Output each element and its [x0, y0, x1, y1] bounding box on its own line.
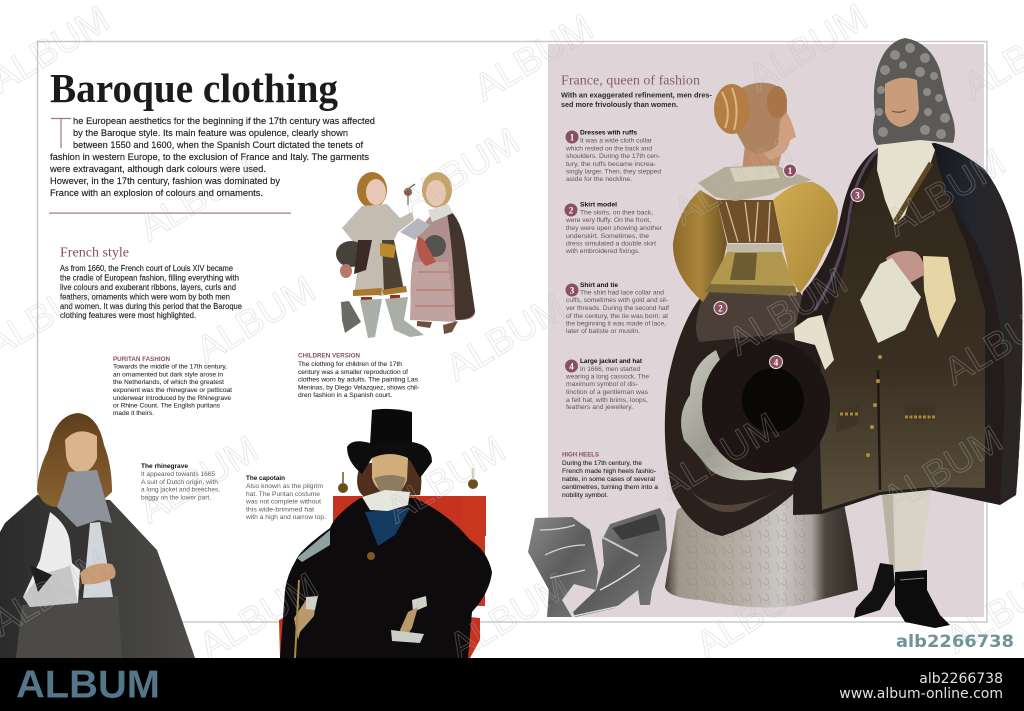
text block: The rhinegrave: baggy on the lower part.	[141, 494, 211, 502]
text block: 2 skirt model: they were open showing another	[566, 225, 663, 232]
overskirt	[665, 292, 830, 536]
text block: 4 large jacket and hat: Large jacket and hat	[580, 358, 643, 365]
intro text block: he European aesthetics for the beginning if the 17th century was affected	[73, 116, 375, 127]
text block: The rhinegrave: The rhinegrave	[141, 463, 188, 470]
text block: 4 large jacket and hat: In 1666, men started	[580, 366, 640, 373]
text block: 2 skirt model: with embroidered fixings.	[565, 248, 640, 255]
text block: 3 shirt and tie: ver threads. During the second half	[566, 305, 669, 312]
text block: Puritan fashion: an ornamented but dark style arose in	[113, 372, 223, 378]
illustration: pair of high-heeled shoes	[528, 508, 667, 617]
watermarks: ALBUM	[721, 260, 855, 364]
stockings and shoes	[854, 485, 950, 628]
text block: high heels: HIGH HEELS	[562, 452, 600, 458]
text block: Children version: century was a smaller reproduction of	[298, 369, 408, 376]
illustration: black hat with ruffled brim	[681, 339, 830, 481]
text block: Children version: The clothing for children of the 17th	[298, 361, 402, 368]
text block: Children version	[298, 352, 419, 399]
text block: 3 shirt and tie	[566, 282, 669, 335]
text block: French style: clothing features were most highlighted.	[60, 311, 196, 320]
callout marker 3: 3	[855, 190, 860, 200]
footer credits: www.album-online.com	[839, 686, 1003, 702]
text block: high heels	[562, 452, 658, 499]
text block: 1 dresses with ruffs: singly larger. Then, they stepped	[566, 168, 661, 176]
illustration: two children	[336, 172, 475, 338]
text block: The rhinegrave: a long jacket and breeches,	[141, 486, 220, 494]
watermarks: ALBUM	[879, 141, 1013, 245]
album id above footer: alb2266738	[896, 632, 1014, 652]
text block: The capotain: was not complete without	[245, 498, 321, 506]
text block: 2 skirt model: dress simulated a double skirt	[566, 240, 656, 248]
panel: France, queen of fashion background	[548, 44, 984, 617]
wig and face	[873, 38, 955, 145]
text block: 4 large jacket and hat: 4	[569, 362, 574, 372]
text block: 3 shirt and tie: The shirt had lace collar and	[580, 290, 664, 296]
text block: Puritan fashion: made it theirs.	[113, 410, 154, 417]
text block: French style: live colours and exuberant ribbons, layers, curls and	[60, 283, 236, 292]
text block: French style: feathers, ornaments which were worn by both men	[60, 292, 230, 302]
callout marker 4: 4	[774, 358, 779, 368]
outer cloak	[793, 143, 1022, 515]
text block: 3 shirt and tie: of the century, the tie was born: at	[566, 313, 668, 320]
text block: 2 skirt model: Skirt model	[580, 202, 617, 208]
text block: French style: and women. It was during this period that the Baroque	[60, 302, 243, 311]
text block: high heels: nobility symbol.	[562, 492, 608, 499]
text block: The capotain: with a high and narrow top.	[245, 514, 326, 521]
text block: high heels: nable, in some cases of several	[562, 476, 655, 483]
text block: panel intro	[561, 90, 712, 109]
text block: 1 dresses with ruffs: It was a wide cloth collar	[580, 138, 653, 144]
text block: 3 shirt and tie: the beginning it was made of lace,	[566, 320, 666, 328]
neck and head	[742, 145, 782, 170]
footer logo: ALBUM	[16, 664, 160, 706]
text block: Children version: dren fashion in a Spanish court.	[298, 392, 392, 399]
text block: 1 dresses with ruffs: 1	[570, 132, 575, 142]
text block: 1 dresses with ruffs: shoulders. During the 17th cen-	[566, 153, 660, 160]
text block: Children version: CHILDREN VERSION	[298, 352, 360, 360]
intro text block: were extravagant, although dark colours were used.	[49, 164, 266, 175]
text block: The capotain: The capotain	[246, 475, 285, 482]
text block: 4 large jacket and hat: maximum symbol of dis-	[566, 381, 638, 388]
text block: Children version: Meninas, by Diego Velazquez, shows chil-	[298, 384, 419, 392]
text block: 4 large jacket and hat: feathers and jewellery.	[566, 404, 633, 411]
text block: The rhinegrave: It appeared towards 1665	[141, 471, 215, 478]
callout marker 2	[714, 302, 727, 314]
text block: Puritan fashion: exponent was the rhinegrave or petticoat	[113, 387, 232, 394]
girl	[400, 172, 475, 334]
callout marker 1: 1	[788, 166, 793, 176]
intro text block: fashion in western Europe, to the exclusion of France and Italy. The garments	[50, 152, 369, 163]
watermarks: ALBUM	[876, 418, 1010, 522]
lace collar	[698, 165, 812, 201]
text block: Puritan fashion: PURITAN FASHION	[113, 356, 170, 363]
hands and cane	[294, 600, 316, 640]
text block: French style	[60, 264, 243, 320]
text block: Puritan fashion	[113, 356, 232, 417]
intro text block: by the Baroque style. Its main feature was opulence, clearly shown	[73, 128, 348, 139]
watermarks: ALBUM	[652, 405, 786, 509]
text block: high heels: centimetres, turning them into a	[562, 484, 658, 491]
illustration: man in rhinegrave costume	[0, 413, 195, 658]
watermarks: ALBUM	[442, 565, 576, 669]
heading: French style: French style	[60, 246, 129, 260]
text block: Puritan fashion: Towards the middle of the 17th century,	[113, 364, 227, 370]
title: Baroque clothing	[50, 65, 338, 111]
footer credits: alb2266738	[919, 671, 1003, 687]
watermarks: ALBUM	[192, 565, 326, 669]
text block: 1 dresses with ruffs: aside for the neckline.	[566, 176, 632, 183]
illustration: man with wig and coat	[793, 38, 1022, 628]
text block: 4 large jacket and hat: tinction of a gentleman was	[566, 389, 649, 396]
watermarks: ALBUM	[666, 130, 800, 234]
text block: 2 skirt model: were very fluffy. On the front,	[565, 217, 651, 224]
text block: 2 skirt model: underskirt. Sometimes, the	[566, 233, 649, 240]
text block: 1 dresses with ruffs: tury, the ruffs became increa-	[566, 161, 656, 168]
text block: 4 large jacket and hat	[565, 358, 649, 411]
text block: 4 large jacket and hat: wearing a long cassock. The	[565, 374, 649, 380]
text block: 1 dresses with ruffs	[565, 130, 661, 183]
underskirt	[665, 495, 858, 608]
intro text block: France with an explosion of colours and ornaments.	[50, 188, 263, 199]
text block: 2 skirt model: The skirts, on their back,	[580, 210, 653, 216]
text block: panel intro: With an exaggerated refinement, men dres-	[561, 90, 712, 100]
text block: French style: the cradle of European fashion, filling everything with	[60, 274, 239, 282]
cuffs and hands	[923, 256, 956, 338]
text block: Puritan fashion: the Netherlands, of which the greatest	[113, 379, 224, 386]
coat	[820, 150, 985, 510]
text block: 4 large jacket and hat: a felt hat, with brims, loops,	[566, 397, 648, 404]
text block: 1 dresses with ruffs: Dresses with ruffs	[580, 130, 637, 136]
watermarks: ALBUM	[393, 120, 527, 224]
boy	[336, 172, 424, 338]
illustration: woman in baroque dress	[665, 83, 858, 608]
text block: high heels: During the 17th century, the	[562, 460, 642, 467]
callout marker 4	[770, 356, 782, 368]
text block: The capotain: Also known as the pilgrim	[246, 483, 324, 490]
text block: The rhinegrave: A suit of Dutch origin, with	[141, 479, 218, 486]
page frame	[38, 42, 987, 622]
sleeves	[673, 190, 727, 302]
text block: 3 shirt and tie: Shirt and tie	[580, 282, 618, 289]
watermarks: ALBUM	[379, 428, 513, 532]
bodice	[717, 200, 782, 243]
footer credits	[839, 671, 1003, 702]
text block: 3 shirt and tie: cuffs, sometimes with gold and sil-	[566, 297, 668, 304]
intro text block: However, in the 17th century, fashion was dominated by	[50, 176, 280, 187]
watermarks: ALBUM	[467, 6, 601, 110]
watermarks: ALBUM	[689, 563, 823, 667]
footer bar	[0, 658, 1024, 711]
text block: 3 shirt and tie: later of batiste or muslin.	[566, 328, 640, 335]
illustration: king seated with capotain hat	[279, 409, 492, 658]
callout marker 3	[851, 188, 864, 202]
text block: Puritan fashion: or Rhine Count. The English puritans	[113, 402, 221, 410]
text block: The capotain: hat. The Puritan costume	[246, 491, 320, 498]
text block: 1 dresses with ruffs: which rested on the back and	[565, 146, 652, 152]
intro text block: between 1550 and 1600, when the Spanish Court dictated the tenets of	[73, 140, 363, 151]
text block: Puritan fashion: underwear introduced by the Rhinegrave	[113, 395, 231, 402]
text block: The capotain: this wide-brimmed hat	[246, 506, 314, 514]
callout marker 2: 2	[718, 304, 723, 314]
text block: high heels: French made high heels fashio-	[562, 468, 656, 475]
text block: Children version: clothes worn by adults. The painting Las	[298, 376, 419, 384]
watermarks: ALBUM	[189, 268, 323, 372]
robe	[280, 498, 492, 658]
watermarks: ALBUM	[132, 146, 266, 250]
chair	[279, 468, 486, 658]
watermarks: ALBUM	[132, 428, 266, 532]
heading: France, queen of fashion: France, queen of fashion	[561, 74, 700, 88]
text block: French style: As from 1660, the French court of Louis XIV became	[60, 264, 234, 273]
text block: panel intro: sed more frivolously than women.	[561, 100, 678, 109]
hair and hat	[357, 455, 421, 498]
callout marker 1	[784, 164, 796, 177]
text block: 3 shirt and tie: 3	[570, 286, 575, 296]
text block: The capotain	[245, 475, 326, 521]
intro text block	[49, 116, 375, 199]
text block: The rhinegrave	[141, 463, 220, 502]
text block: 2 skirt model: 2	[569, 206, 574, 216]
watermarks: ALBUM	[439, 286, 573, 390]
text block: 2 skirt model	[564, 202, 663, 255]
